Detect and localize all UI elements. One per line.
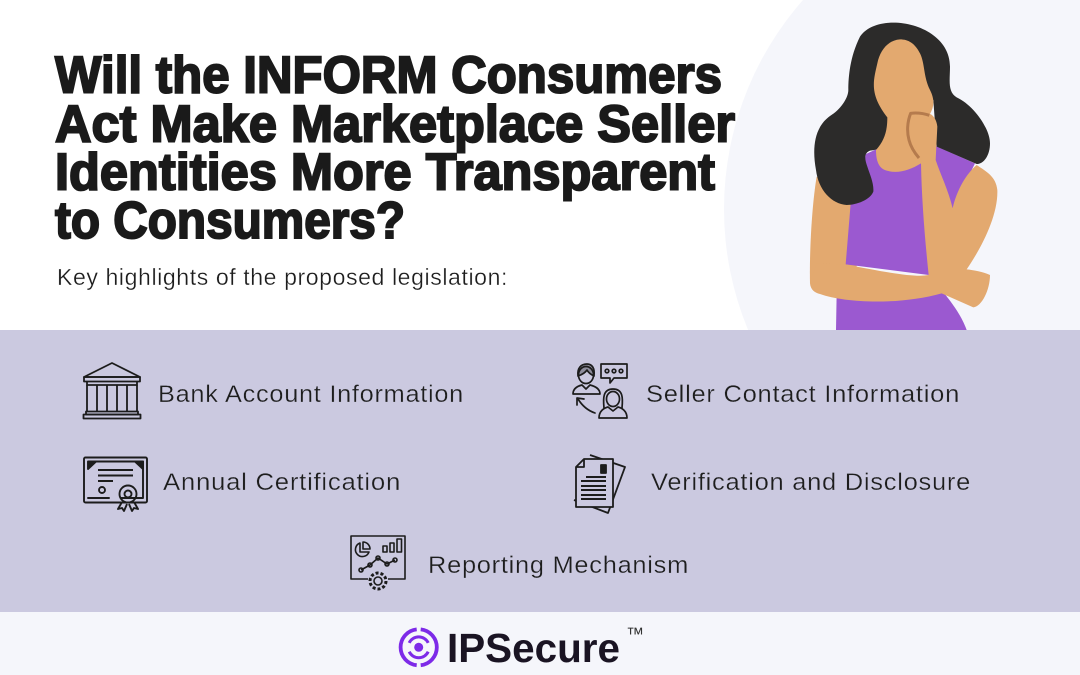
trademark: ™ (626, 624, 644, 644)
icon: annual certification (84, 458, 147, 511)
background circle behind woman (724, 0, 1080, 525)
icon: reporting mechanism (351, 536, 405, 589)
label: verification and disclosure: Verification and Disclosure (651, 469, 971, 496)
logo wordmark: IPSecure (447, 625, 620, 671)
illustration: thoughtful woman (810, 23, 997, 330)
icon: verification documents (574, 455, 625, 513)
icon: bank (84, 363, 140, 418)
title: Act Make Marketplace Seller (55, 96, 735, 154)
title: Will the INFORM Consumers (55, 46, 722, 104)
label: seller contact information: Seller Contact Information (646, 381, 960, 408)
icon: seller contact people (573, 364, 627, 418)
panel: key highlights (0, 330, 1080, 612)
title: to Consumers? (55, 192, 405, 250)
footer band (0, 612, 1080, 675)
subtitle: Key highlights of the proposed legislation: (57, 264, 508, 290)
label: annual certification: Annual Certification (163, 469, 401, 496)
title: Identities More Transparent (55, 144, 715, 202)
label: bank account information: Bank Account Information (158, 381, 464, 408)
logo mark (401, 629, 437, 665)
logo: IPSecure (401, 624, 644, 671)
label: reporting mechanism: Reporting Mechanism (428, 552, 689, 579)
title (55, 46, 735, 250)
